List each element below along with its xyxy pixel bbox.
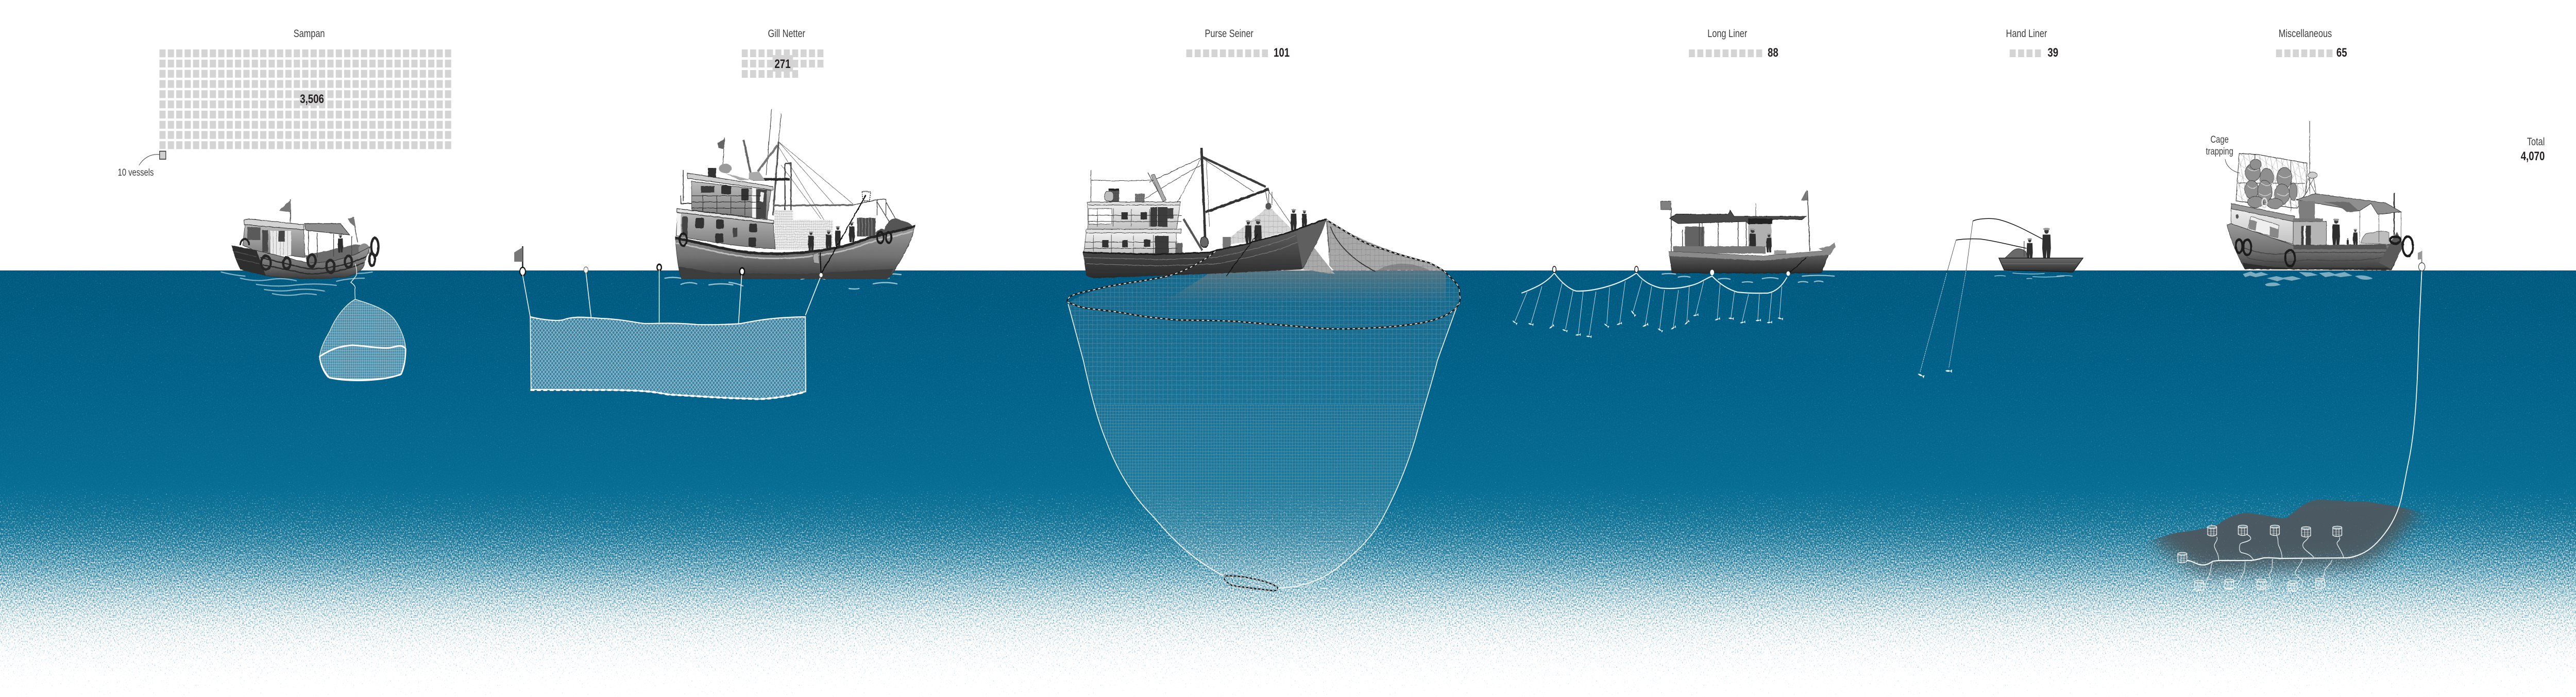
waffle chart: Long Liner 88: 88 [1768,46,1778,60]
heading: Long Liner: Long Liner [1707,27,1747,39]
legend: 10 vessels: 10 vessels [118,167,154,178]
waffle chart: Miscellaneous 65: 65 [2336,46,2347,60]
buoy with flag [2418,251,2425,271]
panel: Long Liner [1512,27,1836,338]
waffle chart: Sampan 3,506 [159,49,451,149]
sea background with grainy fade [0,270,2576,697]
illustration: Long Liner boat [1660,190,1836,274]
fishing rods and lines [1917,218,2043,379]
waffle chart: Sampan 3,506: 3,506 [300,92,324,106]
illustration: Miscellaneous boat [2227,121,2413,270]
heading: Gill Netter: Gill Netter [768,27,805,39]
longline gear with hooks and fish [1512,266,1790,338]
waffle chart: Long Liner 88 [1689,46,1778,60]
panel: Hand Liner [1917,27,2083,379]
waffle chart: Gill Netter 271 [742,49,824,78]
callout: cage trapping: trapping [2206,146,2233,157]
heading: Purse Seiner: Purse Seiner [1205,27,1253,39]
illustration: Gill Netter boat [675,109,915,279]
callout: cage trapping: Cage [2211,134,2229,145]
cast net: Sampan [319,264,405,380]
panel: Purse Seiner [1057,27,1466,595]
float line of purse seine [1067,220,1460,329]
gill net [522,270,820,399]
illustration: Sampan boat [231,199,379,279]
net hauled above water [1327,219,1443,271]
waffle chart: Purse Seiner 101 [1187,46,1290,60]
illustration: Purse Seiner boat [1083,148,1335,278]
total vessels: 4,070 [2521,149,2545,163]
waffle chart: Purse Seiner 101: 101 [1274,46,1290,60]
panel: Gill Netter [514,27,915,399]
cage traps on rope [2178,270,2422,591]
water foam: Gill Netter [665,274,901,289]
heading: Hand Liner: Hand Liner [2006,27,2047,39]
waffle chart: Gill Netter 271: 271 [774,57,791,71]
waffle chart: Hand Liner 39: 39 [2047,46,2058,60]
water foam: Miscellaneous [2243,271,2372,286]
callout: cage trapping [2206,134,2240,173]
purse ring at net bottom [1224,576,1278,591]
seabed with cages [2155,479,2419,573]
panel: Miscellaneous [2155,27,2425,591]
water foam: Long Liner [1662,274,1834,282]
total vessels: Total [2527,135,2545,147]
panel: Sampan [118,27,451,380]
waffle chart: Miscellaneous 65 [2276,46,2347,60]
illustration: Hand Liner boat [1994,228,2083,279]
purse seine net underwater [1057,270,1466,595]
legend: 10 vessels [118,151,166,178]
flag buoy and floats: Gill Netter [514,246,823,277]
heading: Miscellaneous: Miscellaneous [2279,27,2332,39]
heading: Sampan: Sampan [294,27,325,39]
total vessels [2521,135,2545,163]
waffle chart: Hand Liner 39 [2010,46,2058,60]
water foam: Sampan [221,272,372,295]
